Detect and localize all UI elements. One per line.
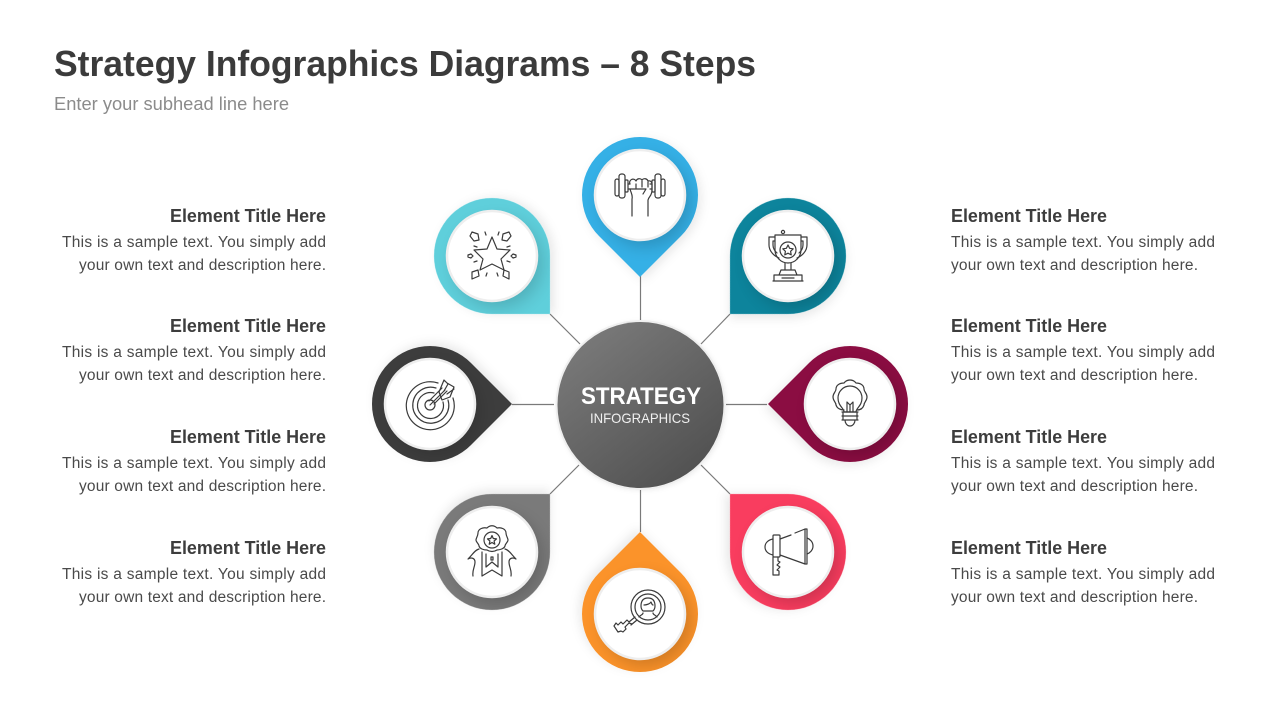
icon: fist with dumbbell — [615, 174, 665, 216]
left text 4 — [62, 538, 326, 606]
right text 1: your own text and description here. — [951, 257, 1198, 274]
icon: light bulb — [833, 380, 867, 426]
pin: top right teal, trophy — [728, 198, 848, 320]
center subheading: INFOGRAPHICS — [590, 410, 690, 426]
right text 2: This is a sample text. You simply add — [951, 344, 1215, 361]
connector lines — [512, 276, 767, 532]
right text 2: your own text and description here. — [951, 367, 1198, 384]
left text 3: This is a sample text. You simply add — [62, 455, 326, 472]
icon: megaphone — [765, 529, 813, 575]
left text 1: This is a sample text. You simply add — [62, 234, 326, 251]
right text 2 — [951, 316, 1215, 384]
right text 3: Element Title Here — [951, 427, 1107, 447]
right text 3 — [951, 427, 1215, 495]
pin: bottom right red, megaphone — [724, 492, 846, 612]
icon: medal ribbon — [468, 526, 516, 576]
pin: bottom orange, key — [582, 532, 698, 672]
left text 3 — [62, 427, 326, 495]
icon: key with person — [614, 590, 665, 632]
left text 3: your own text and description here. — [79, 478, 326, 495]
right text 1 — [951, 206, 1215, 274]
right text 4: Element Title Here — [951, 538, 1107, 558]
pin: top left aqua, star — [434, 196, 556, 316]
right text 1: This is a sample text. You simply add — [951, 234, 1215, 251]
right text 4 — [951, 538, 1215, 606]
left text 2 — [62, 316, 326, 384]
pin: right maroon, light bulb — [768, 346, 908, 462]
center heading: STRATEGY — [581, 383, 701, 410]
subtitle: Enter your subhead line here — [54, 93, 289, 114]
right text 4: This is a sample text. You simply add — [951, 566, 1215, 583]
title: Strategy Infographics Diagrams – 8 Steps — [54, 43, 756, 84]
left text 1: Element Title Here — [170, 206, 326, 226]
pin: left dark, target — [372, 346, 512, 462]
icon: star with sparkles — [468, 232, 516, 279]
left text 4: Element Title Here — [170, 538, 326, 558]
left text 1 — [62, 206, 326, 274]
right text 4: your own text and description here. — [951, 589, 1198, 606]
right text 3: This is a sample text. You simply add — [951, 455, 1215, 472]
left text 4: This is a sample text. You simply add — [62, 566, 326, 583]
right text 3: your own text and description here. — [951, 478, 1198, 495]
left text 2: Element Title Here — [170, 316, 326, 336]
left text 1: your own text and description here. — [79, 257, 326, 274]
pin: bottom left gray, medal — [432, 488, 552, 610]
left text 4: your own text and description here. — [79, 589, 326, 606]
center circle — [556, 320, 726, 490]
icon: trophy — [769, 230, 807, 281]
left text 2: This is a sample text. You simply add — [62, 344, 326, 361]
right text 1: Element Title Here — [951, 206, 1107, 226]
right text 2: Element Title Here — [951, 316, 1107, 336]
left text 2: your own text and description here. — [79, 367, 326, 384]
icon: target with arrow — [406, 380, 454, 430]
pin: top blue, dumbbell — [582, 137, 698, 277]
left text 3: Element Title Here — [170, 427, 326, 447]
